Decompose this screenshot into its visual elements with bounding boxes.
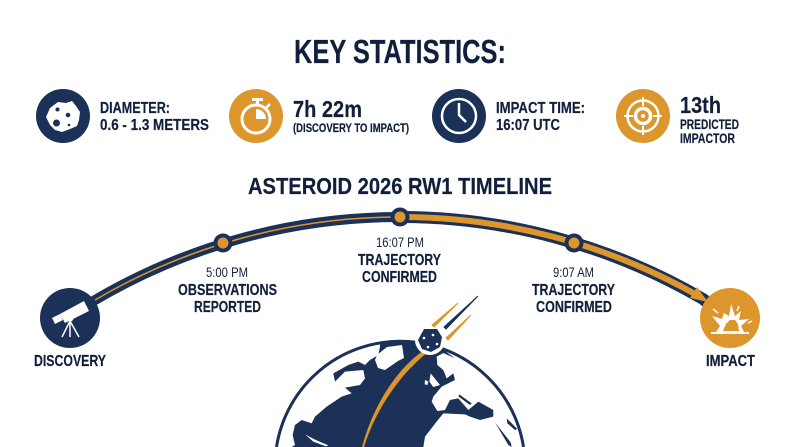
trajectory line xyxy=(362,350,428,447)
predicted impactor text: 13th xyxy=(680,92,721,118)
predicted impactor text: PREDICTED xyxy=(680,117,739,132)
event: trajectory confirmed 9:07: CONFIRMED xyxy=(536,299,612,316)
timeline node 1 xyxy=(214,234,232,252)
event: trajectory confirmed 16:07: 16:07 PM xyxy=(376,234,424,250)
event: trajectory confirmed 9:07 xyxy=(532,264,616,316)
land: europe africa asia xyxy=(423,352,522,447)
event: observations reported xyxy=(178,264,277,316)
timeline heading: ASTEROID 2026 RW1 TIMELINE xyxy=(248,173,552,199)
predicted impactor text: IMPACTOR xyxy=(680,131,735,146)
stat: predicted impactor xyxy=(616,89,739,146)
icon: telescope xyxy=(40,288,100,348)
event: trajectory confirmed 16:07: CONFIRMED xyxy=(362,269,437,286)
stat: diameter xyxy=(36,89,209,143)
land: greenland xyxy=(375,345,414,370)
globe xyxy=(275,340,525,447)
duration text: 7h 22m xyxy=(293,96,362,122)
impact time text: IMPACT TIME: xyxy=(496,100,585,117)
icon: target xyxy=(616,89,670,143)
event: observations reported: 5:00 PM xyxy=(206,264,248,280)
event: trajectory confirmed 9:07: 9:07 AM xyxy=(553,264,594,280)
event: observations reported: OBSERVATIONS xyxy=(178,282,277,299)
event: observations reported: REPORTED xyxy=(194,299,261,316)
impact time text: 16:07 UTC xyxy=(496,117,560,134)
land: north america xyxy=(278,344,380,447)
meteor streaks xyxy=(432,303,458,327)
event: trajectory confirmed 16:07: TRAJECTORY xyxy=(358,252,442,269)
icon: impact explosion xyxy=(700,288,760,348)
red sea and gulf xyxy=(458,394,517,447)
label: impact: IMPACT xyxy=(706,353,755,370)
diameter text xyxy=(100,100,209,134)
timeline arc xyxy=(90,217,712,306)
stat: impact time xyxy=(432,89,585,143)
icon: stopwatch xyxy=(229,89,283,143)
duration text xyxy=(293,96,409,135)
diameter text: 0.6 - 1.3 METERS xyxy=(100,117,209,134)
label: discovery: DISCOVERY xyxy=(34,353,107,370)
diameter text: DIAMETER: xyxy=(100,100,170,117)
impact time text xyxy=(496,100,585,134)
stat: duration xyxy=(229,89,409,143)
event: trajectory confirmed 9:07: TRAJECTORY xyxy=(532,282,616,299)
timeline node 3 xyxy=(564,234,584,252)
event: trajectory confirmed 16:07 xyxy=(358,234,442,286)
land: caribbean xyxy=(305,434,328,446)
icon: clock xyxy=(432,89,486,143)
icon: asteroid xyxy=(36,89,90,143)
icon: falling asteroid xyxy=(415,296,478,355)
land: british isles xyxy=(425,373,440,387)
predicted impactor text xyxy=(680,92,739,146)
arrow head xyxy=(690,287,708,302)
title: KEY STATISTICS: xyxy=(294,33,506,70)
timeline node 2 xyxy=(390,208,410,226)
duration text: (DISCOVERY TO IMPACT) xyxy=(293,123,409,135)
